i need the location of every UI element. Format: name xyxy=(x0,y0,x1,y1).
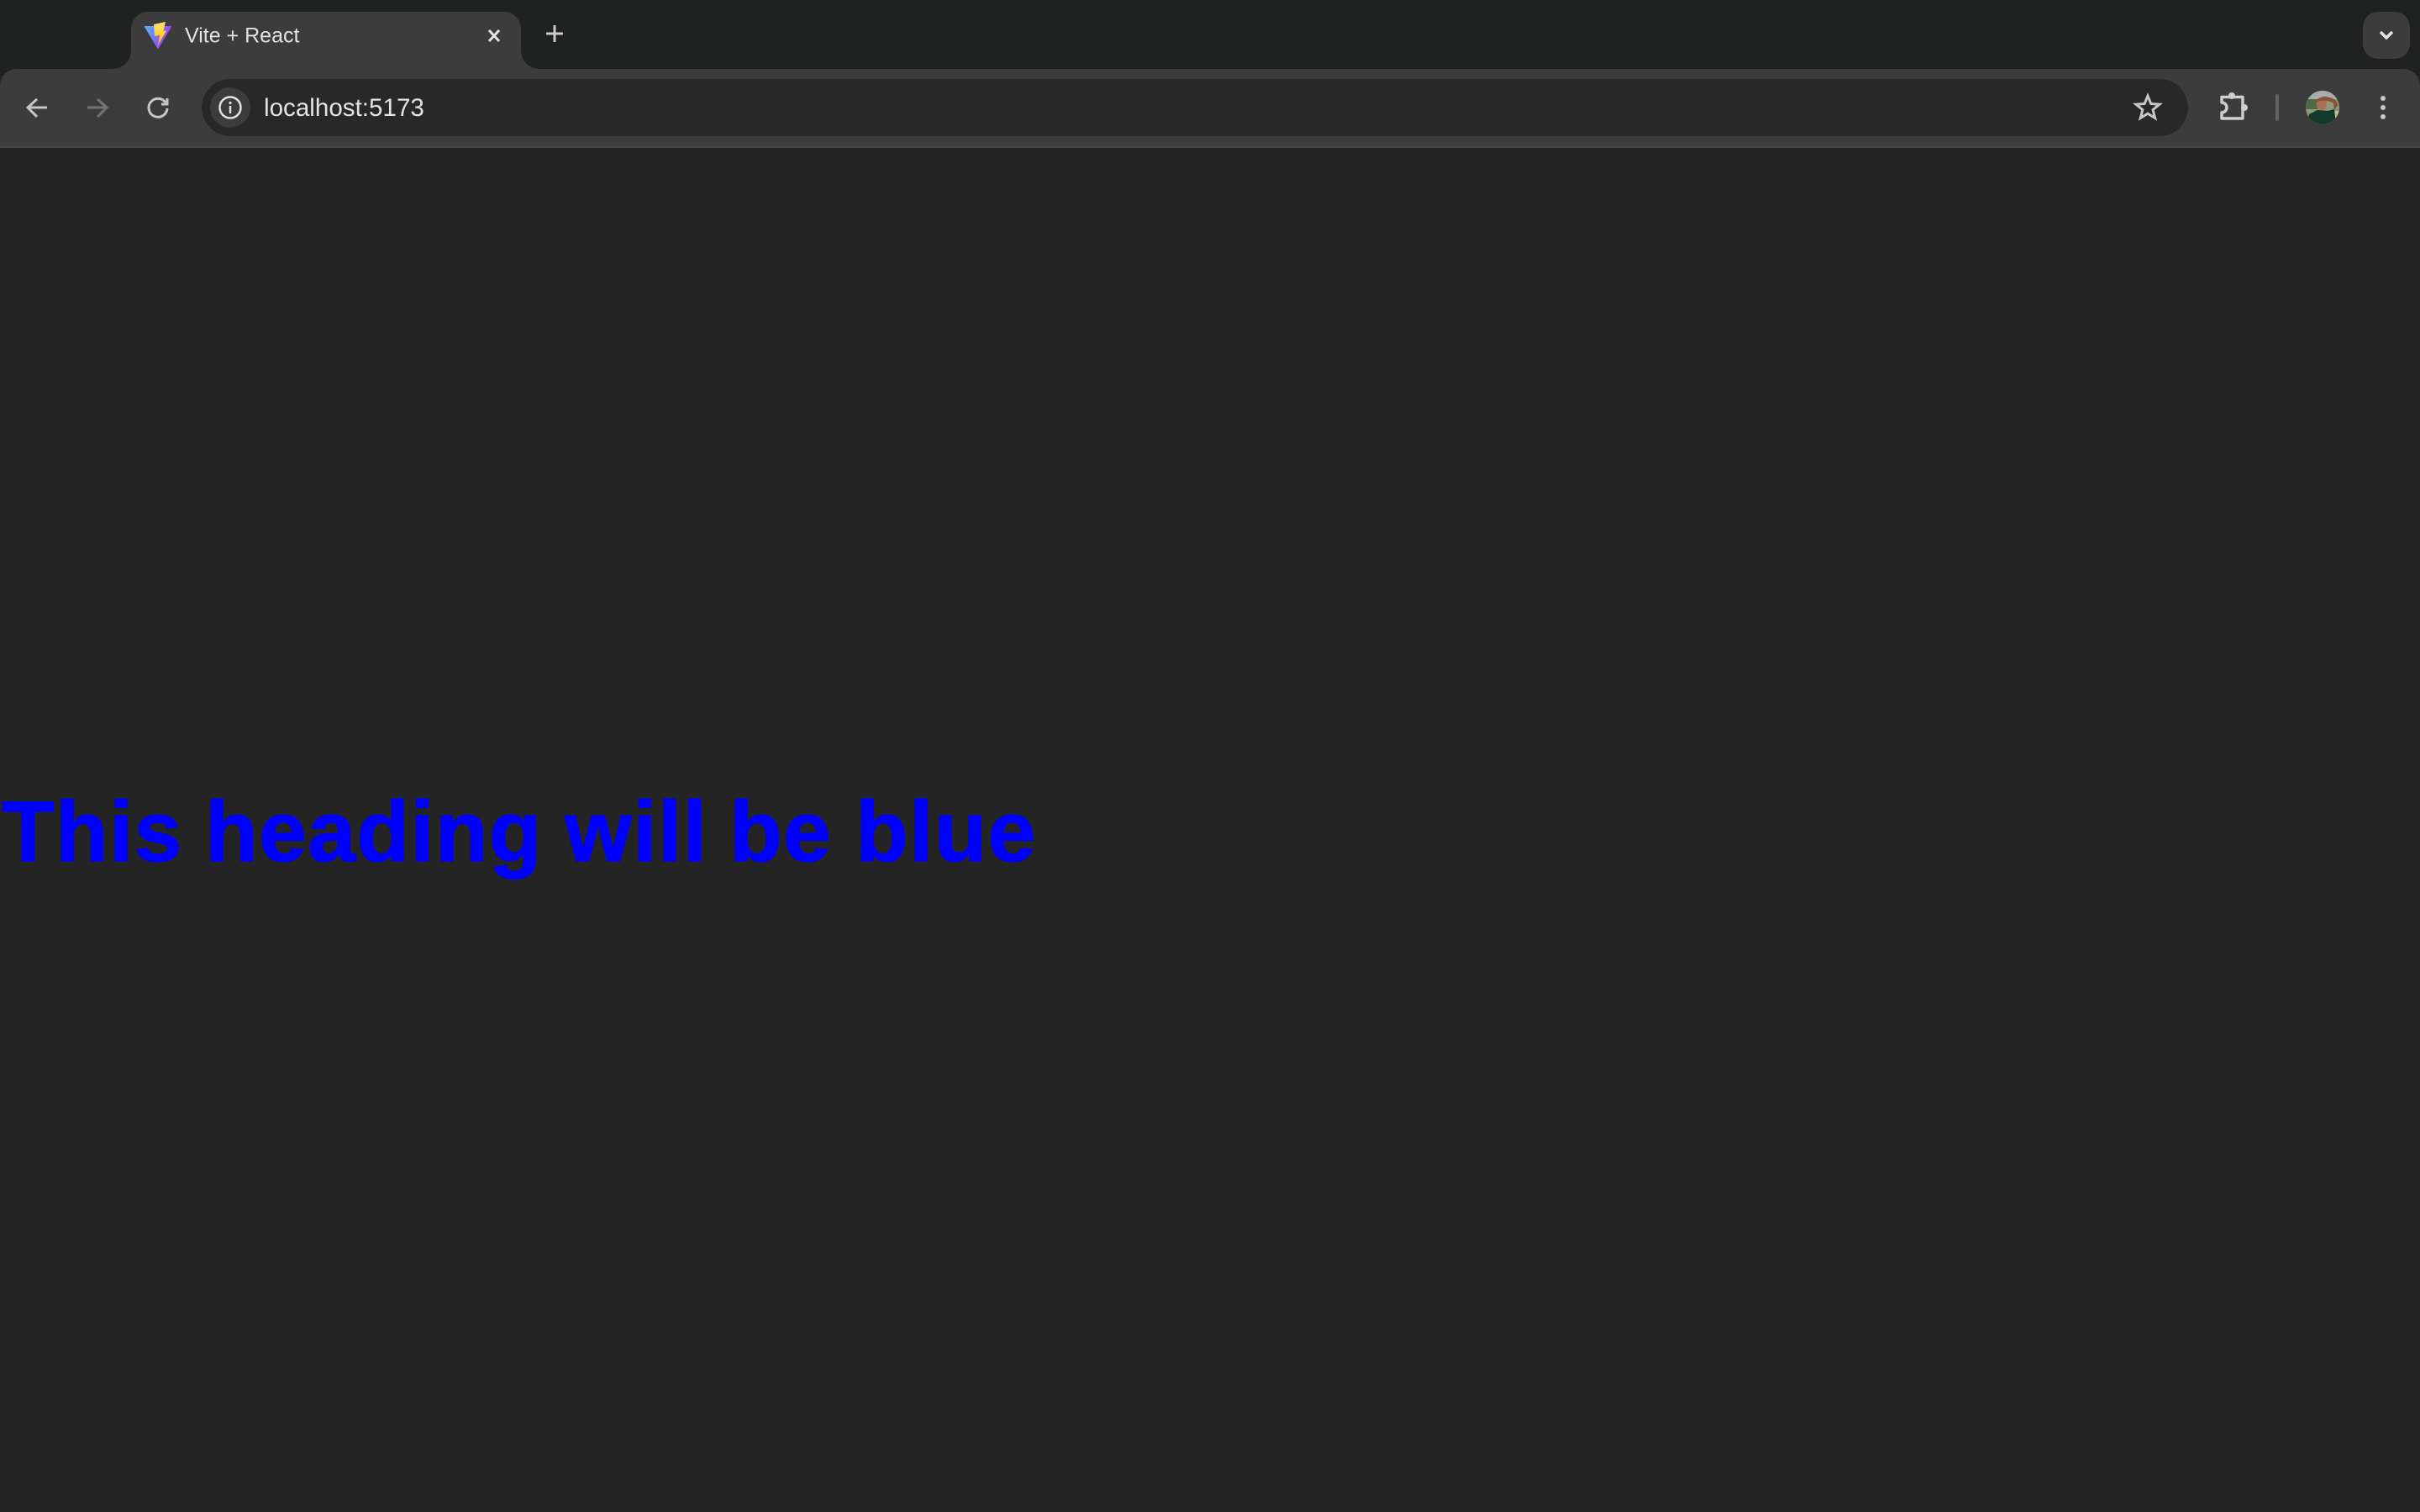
heading: be xyxy=(729,783,832,879)
icon: Vite logo xyxy=(145,22,171,49)
icon: forward arrow disabled xyxy=(87,99,107,117)
active browser tab xyxy=(113,12,539,69)
icon: close tab xyxy=(489,30,499,41)
browser tab strip xyxy=(0,0,2420,76)
icon: new tab plus xyxy=(546,25,563,42)
heading: blue xyxy=(855,783,1037,879)
tab title: Vite + React xyxy=(185,24,299,47)
heading: will xyxy=(564,783,708,879)
address text: localhost:5173 xyxy=(264,94,424,122)
icon: back arrow xyxy=(28,99,47,117)
browser toolbar xyxy=(0,69,2420,148)
address bar xyxy=(202,79,2188,136)
icon: chevron down xyxy=(2381,32,2392,38)
icon: extensions puzzle xyxy=(2222,92,2248,118)
toolbar separator xyxy=(2275,94,2279,121)
heading: This xyxy=(2,783,183,879)
site info button xyxy=(210,87,250,128)
tab list dropdown button xyxy=(2363,12,2410,59)
icon: bookmark star xyxy=(2136,96,2160,118)
heading: heading xyxy=(205,783,543,879)
icon: chrome menu dots xyxy=(2381,96,2386,119)
icon: reload xyxy=(149,98,167,117)
profile avatar xyxy=(2306,91,2341,124)
